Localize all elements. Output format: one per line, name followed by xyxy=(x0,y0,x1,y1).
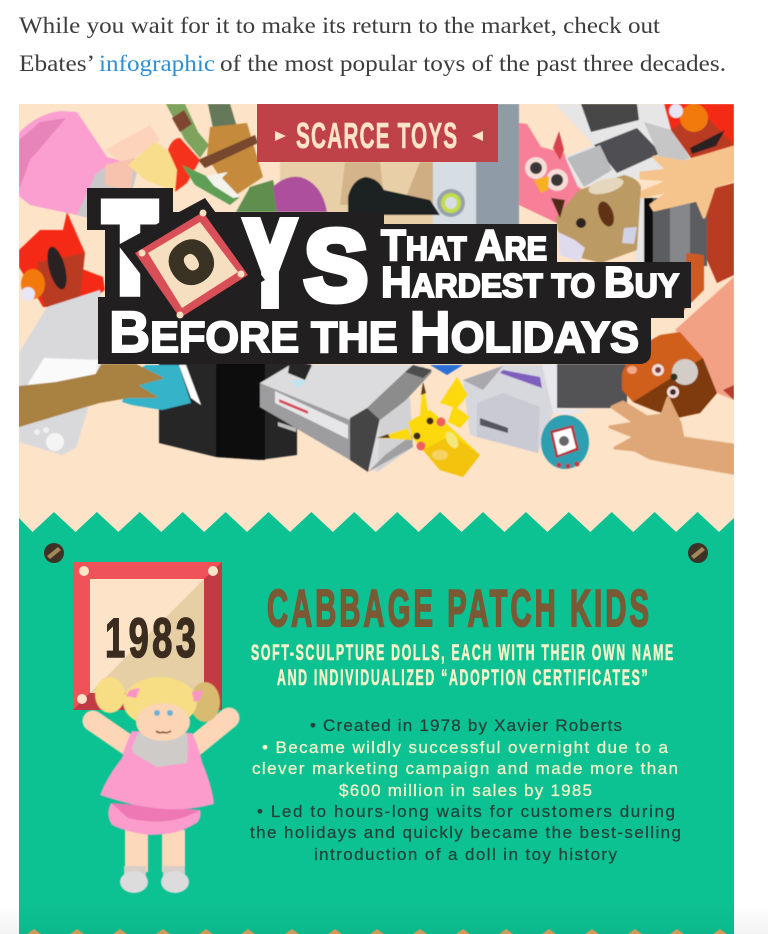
banner: scarce toys xyxy=(257,104,498,162)
letter O frame: O xyxy=(159,228,225,298)
icon: tan plush dog xyxy=(551,175,641,263)
icon: brown teddy bear xyxy=(622,332,734,418)
icon: blue toy xyxy=(430,365,463,375)
icon: left screw xyxy=(44,543,64,563)
title block xyxy=(87,179,691,365)
title line: hardest to buy: HARDEST TO BUY xyxy=(381,258,679,307)
banner: scarce toys: SCARCE TOYS xyxy=(296,116,457,157)
icon: tan dollhouse xyxy=(280,162,434,224)
title word: toys: Y xyxy=(246,198,294,328)
icon: tamagotchi xyxy=(541,415,589,469)
intro paragraph: While you wait for it to make its return to the market, check out xyxy=(19,13,661,39)
icon: game controller left xyxy=(19,290,108,455)
title backing xyxy=(87,188,691,364)
year frame xyxy=(73,562,222,710)
fact list: introduction of a doll in toy history xyxy=(314,845,618,864)
icon: grey speaker device xyxy=(636,198,707,266)
bottom zigzag edge xyxy=(27,929,727,934)
fact list: the holidays and quickly became the best-selling xyxy=(250,823,681,842)
icon: SNES console xyxy=(463,365,553,453)
icon: pink hat xyxy=(19,111,178,220)
heading: CABBAGE PATCH KIDS xyxy=(267,579,649,637)
icon: red panel xyxy=(707,183,734,283)
title line: before the holidays: BEFORE THE HOLIDAYS xyxy=(109,300,639,365)
title word: toys xyxy=(100,198,368,318)
icon: cabbage patch doll xyxy=(93,677,229,893)
fact list: clever marketing campaign and made more than xyxy=(252,759,678,778)
fact list: • Became wildly successful overnight due to a xyxy=(262,738,669,757)
subheading: AND INDIVIDUALIZED “ADOPTION CERTIFICATES” xyxy=(277,665,648,690)
icon: teal toy and left hand xyxy=(19,365,201,426)
intro paragraph: Ebates’ xyxy=(19,51,95,77)
icon: orange bear arm xyxy=(684,252,705,311)
icon: dark figure xyxy=(348,177,440,215)
icon: right screw xyxy=(688,543,708,563)
icon: NES console xyxy=(260,360,432,472)
panel: cabbage patch kids xyxy=(19,512,734,934)
icon: black console xyxy=(159,360,297,460)
icon: grey console tower xyxy=(433,104,519,232)
icon: handheld game console xyxy=(555,104,690,187)
icon: dark screen xyxy=(542,364,627,415)
icon: red muppet left xyxy=(19,212,105,307)
icon: pink owl toy xyxy=(519,123,581,223)
fact list: • Created in 1978 by Xavier Roberts xyxy=(310,716,622,735)
intro paragraph: infographic xyxy=(99,51,215,77)
fact list xyxy=(250,716,681,864)
title line: that are: THAT ARE xyxy=(381,221,547,270)
year label: 1983 xyxy=(105,607,196,670)
intro paragraph: of the most popular toys of the past three decades. xyxy=(220,51,726,77)
header panel background xyxy=(19,104,734,534)
icon: ninja turtle xyxy=(166,104,280,212)
zigzag green panel xyxy=(19,512,734,934)
icon: bottom right hand xyxy=(610,398,733,473)
icon: peach arm xyxy=(675,277,734,400)
fact list: • Led to hours-long waits for customers during xyxy=(257,802,675,821)
title word: toys: S xyxy=(304,210,368,322)
intro paragraph xyxy=(19,13,726,77)
letter O frame xyxy=(118,198,265,325)
icon: toy collage xyxy=(19,104,734,477)
icon: hand top right xyxy=(641,147,734,217)
subheading xyxy=(251,640,673,690)
icon: red muppet top right xyxy=(664,104,734,158)
icon: pikachu xyxy=(377,377,480,477)
title word: toys: T xyxy=(104,179,156,318)
fact list: $600 million in sales by 1985 xyxy=(339,781,592,800)
icon: purple toy xyxy=(273,177,327,212)
subheading: SOFT-SCULPTURE DOLLS, EACH WITH THEIR OWN NAME xyxy=(251,640,673,665)
